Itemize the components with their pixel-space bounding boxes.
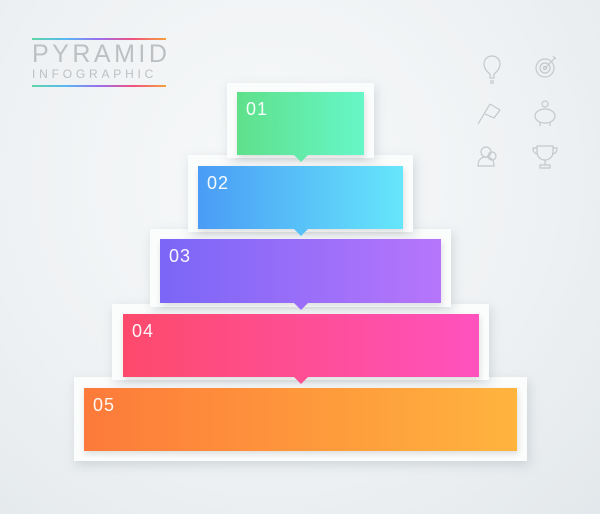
box 04 xyxy=(123,314,479,377)
title: INFOGRAPHIC xyxy=(32,67,157,81)
tier 1 plate xyxy=(227,83,374,158)
icon: flag xyxy=(478,104,500,124)
icon: trophy xyxy=(533,146,557,168)
box 03: 03 xyxy=(169,246,191,266)
box 02: 02 xyxy=(207,173,229,193)
icon: bulb xyxy=(484,56,500,83)
title xyxy=(32,38,170,87)
tier 3 plate xyxy=(150,229,451,307)
icons grid xyxy=(477,55,558,169)
icon: people xyxy=(478,147,496,166)
tier 2 plate xyxy=(188,155,413,232)
tier 4 plate xyxy=(112,304,489,380)
box 01: 01 xyxy=(246,99,268,119)
tier 5 plate xyxy=(74,377,527,461)
title: PYRAMID xyxy=(32,40,170,68)
box 01 xyxy=(237,92,364,155)
box 05: 05 xyxy=(93,395,115,415)
icon: target xyxy=(536,56,556,77)
icon: piggy bank xyxy=(535,101,555,126)
box 02 xyxy=(198,166,403,229)
box 04: 04 xyxy=(132,321,154,341)
box 05 xyxy=(84,388,517,451)
box 03 xyxy=(160,239,441,303)
